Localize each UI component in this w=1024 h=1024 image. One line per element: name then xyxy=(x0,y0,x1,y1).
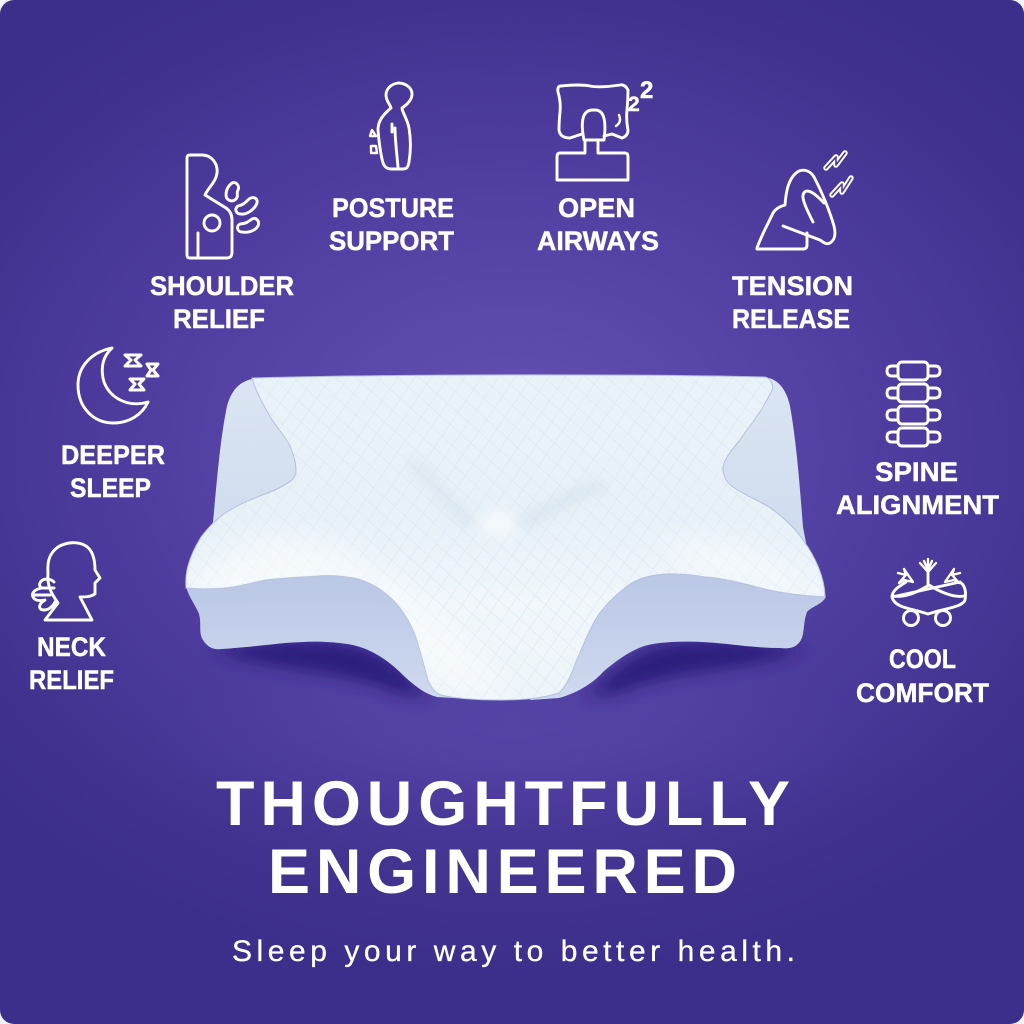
icon: deeper sleep moon xyxy=(78,348,158,423)
label: open airways: OPEN xyxy=(558,193,635,223)
label: shoulder relief xyxy=(150,271,294,334)
title: ENGINEERED xyxy=(268,837,737,907)
label: neck relief: NECK xyxy=(37,632,106,662)
icon: shoulder relief xyxy=(187,155,259,258)
label: deeper sleep xyxy=(61,440,165,503)
label: open airways xyxy=(537,193,659,256)
label: deeper sleep: SLEEP xyxy=(70,473,151,503)
label: spine alignment xyxy=(836,457,1000,520)
label: tension release: RELEASE xyxy=(732,304,850,334)
pillow front side right xyxy=(530,566,826,700)
icon: cool comfort xyxy=(892,559,965,626)
label: neck relief xyxy=(29,632,114,695)
label: shoulder relief: RELIEF xyxy=(173,304,265,334)
label: posture support xyxy=(329,193,454,256)
icon: posture support xyxy=(370,83,412,169)
icon: neck relief xyxy=(32,543,100,620)
label: posture support: SUPPORT xyxy=(329,226,454,256)
label: spine alignment: ALIGNMENT xyxy=(836,490,1000,520)
label: shoulder relief: SHOULDER xyxy=(150,271,294,301)
label: neck relief: RELIEF xyxy=(29,665,114,695)
pillow neck dent shading xyxy=(415,466,470,523)
label: open airways: AIRWAYS xyxy=(537,226,659,256)
icon: small sleep Z: 2 xyxy=(628,93,640,116)
title: THOUGHTFULLY xyxy=(216,769,790,839)
pillow back side panels xyxy=(205,378,807,548)
icon: large sleep Z: 2 xyxy=(640,77,653,104)
label: cool comfort: COOL xyxy=(889,644,956,674)
pillow top surface xyxy=(186,375,825,700)
pillow shadow xyxy=(210,641,806,698)
icon: spine alignment xyxy=(887,362,940,446)
pillow product image xyxy=(180,370,830,705)
title xyxy=(216,769,790,907)
pillow front side left xyxy=(186,570,470,699)
icon: tension release xyxy=(757,153,851,249)
subtitle: Sleep your way to better health. xyxy=(232,935,795,968)
label: tension release xyxy=(732,271,853,334)
label: cool comfort xyxy=(856,644,989,708)
label: cool comfort: COMFORT xyxy=(856,678,989,708)
label: posture support: POSTURE xyxy=(332,193,454,223)
icon: open airways xyxy=(557,85,628,180)
label: spine alignment: SPINE xyxy=(875,457,958,487)
pillow quilted pattern xyxy=(180,370,830,705)
label: deeper sleep: DEEPER xyxy=(61,440,165,470)
label: tension release: TENSION xyxy=(732,271,853,301)
